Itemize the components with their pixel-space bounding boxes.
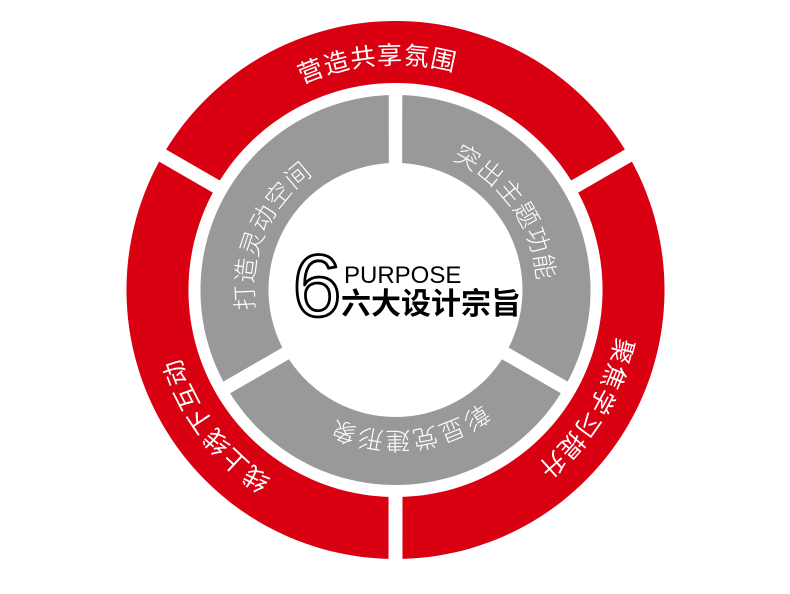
panel: inner bottom segment: 彰显党建形象 — [333, 406, 490, 453]
panel: outer right segment: 聚焦学习提升 — [540, 338, 636, 478]
panel: outer top segment — [166, 21, 625, 180]
panel: outer top segment: 营造共享氛围 — [296, 42, 456, 84]
panel: inner left segment — [200, 95, 389, 382]
icon: outlined numeral 6: 6 — [292, 236, 341, 335]
panel: inner bottom segment — [230, 359, 561, 485]
heading: PURPOSE: PURPOSE — [344, 262, 461, 289]
panel: inner right segment — [402, 95, 590, 382]
panel: inner right segment: 突出主题功能 — [453, 144, 557, 279]
heading: 六大设计宗旨: 六大设计宗旨 — [341, 288, 521, 321]
panel: inner left segment: 打造灵动空间 — [233, 160, 312, 310]
panel: outer left segment: 线上线下互动 — [162, 360, 270, 493]
center title — [292, 236, 521, 335]
